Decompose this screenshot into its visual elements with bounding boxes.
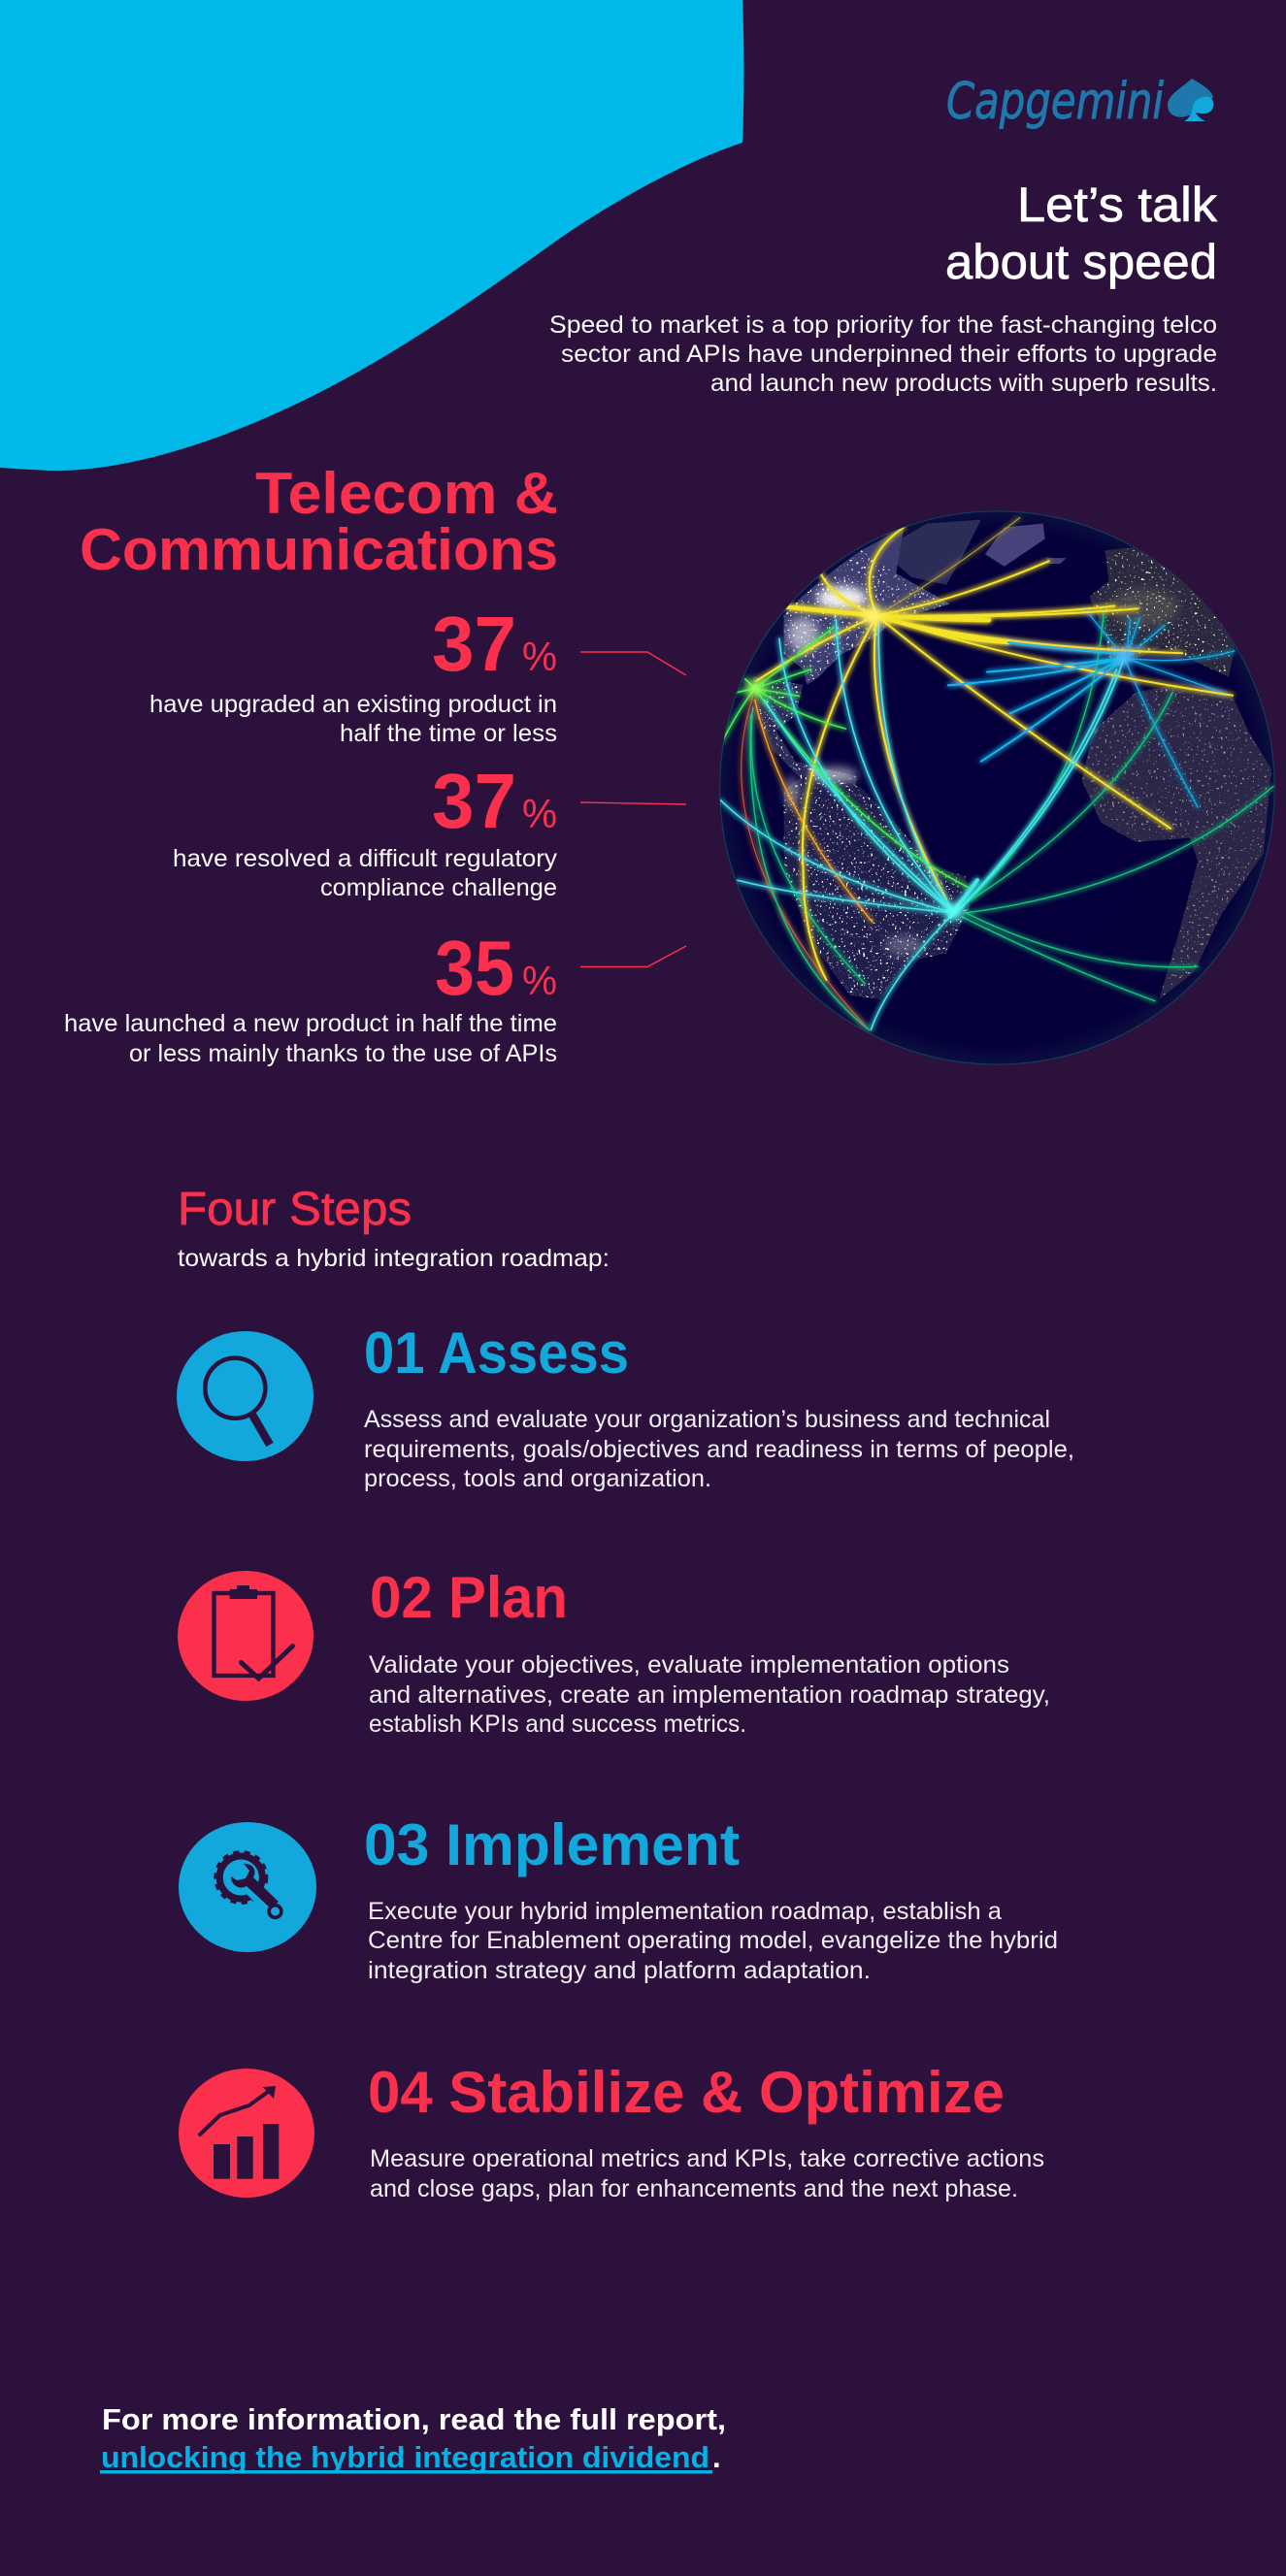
call to action bbox=[100, 2402, 726, 2474]
heading: Four Steps: Four Steps bbox=[178, 1184, 412, 1235]
step 04: Stabilize & Optimize: 04 Stabilize & Optimize bbox=[368, 2060, 1005, 2125]
heading: Telecom & Communications bbox=[80, 461, 558, 582]
stat: 37% regulatory: % bbox=[522, 791, 557, 836]
subheading: towards a hybrid integration roadmap: bbox=[178, 1245, 610, 1272]
call to action: . bbox=[712, 2440, 721, 2474]
network arcs bbox=[720, 518, 1273, 1029]
stat: 35% launched: % bbox=[522, 958, 557, 1003]
logo: Capgemini: Capgemini bbox=[946, 73, 1164, 131]
step 03: Implement: 03 Implement bbox=[364, 1812, 740, 1877]
step 03: Implement bbox=[179, 1812, 1058, 1984]
bright metropolitan glows bbox=[784, 586, 1178, 957]
step 03: Implement: integration strategy and platform adaptation. bbox=[368, 1957, 871, 1984]
stat: 35% launched: have launched a new product in half the time bbox=[64, 1010, 557, 1037]
stat: 37% upgraded: % bbox=[522, 634, 557, 679]
title bbox=[945, 178, 1218, 289]
intro paragraph: Speed to market is a top priority for the fast-changing telco bbox=[549, 311, 1217, 339]
heading: Telecom & Communications: Telecom & bbox=[255, 461, 558, 526]
stat: 35% launched: or less mainly thanks to the use of APIs bbox=[129, 1040, 557, 1067]
step 01: Assess: 01 Assess bbox=[364, 1321, 629, 1386]
stat: 37% upgraded bbox=[149, 601, 557, 747]
title: Let’s talk bbox=[1017, 178, 1218, 232]
step 04: Stabilize & Optimize bbox=[179, 2060, 1044, 2202]
call to action: For more information, read the full report, bbox=[102, 2402, 726, 2436]
icon: clipboard bbox=[178, 1571, 313, 1701]
step 02: Plan bbox=[178, 1565, 1050, 1738]
icon: gear and wrench bbox=[179, 1822, 316, 1952]
heading: Telecom & Communications: Communications bbox=[80, 517, 558, 582]
step 02: Plan: and alternatives, create an implementation roadmap strategy, bbox=[369, 1681, 1050, 1709]
stat: 37% upgraded: have upgraded an existing product in bbox=[149, 691, 557, 718]
step 04: Stabilize & Optimize: and close gaps, plan for enhancements and the next phase. bbox=[370, 2175, 1018, 2202]
globe with network arcs bbox=[720, 511, 1274, 1064]
icon: spade bbox=[1168, 79, 1213, 121]
decorative cyan blob bbox=[0, 0, 743, 471]
stat: 35% launched bbox=[64, 925, 557, 1067]
step 02: Plan: Validate your objectives, evaluate implementation options bbox=[369, 1651, 1009, 1679]
stat: 37% regulatory: have resolved a difficult regulatory bbox=[173, 845, 558, 872]
step 02: Plan: establish KPIs and success metrics. bbox=[369, 1711, 746, 1738]
intro paragraph: sector and APIs have underpinned their efforts to upgrade bbox=[561, 341, 1217, 368]
intro paragraph bbox=[549, 311, 1217, 397]
step 01: Assess: process, tools and organization. bbox=[364, 1465, 711, 1492]
step 04: Stabilize & Optimize: Measure operational metrics and KPIs, take corrective actions bbox=[370, 2145, 1044, 2172]
icon: magnifier bbox=[177, 1331, 313, 1461]
stat: 37% upgraded: 37 bbox=[432, 601, 516, 687]
stat: 37% regulatory: compliance challenge bbox=[320, 874, 557, 901]
step 01: Assess bbox=[177, 1321, 1074, 1492]
step 01: Assess: requirements, goals/objectives and readiness in terms of people, bbox=[364, 1436, 1074, 1463]
city light speckle bbox=[753, 550, 970, 999]
icon: growth chart bbox=[179, 2069, 314, 2198]
stat: 37% regulatory bbox=[173, 758, 558, 901]
connector lines bbox=[580, 652, 686, 966]
land masses bbox=[753, 520, 1271, 999]
intro paragraph: and launch new products with superb results. bbox=[710, 370, 1217, 397]
hubs bbox=[746, 604, 1132, 920]
title: about speed bbox=[945, 235, 1217, 289]
stat: 37% upgraded: half the time or less bbox=[340, 720, 557, 747]
step 01: Assess: Assess and evaluate your organization’s business and technical bbox=[364, 1406, 1050, 1433]
step 03: Implement: Execute your hybrid implementation roadmap, establish a bbox=[368, 1898, 1002, 1925]
stat: 37% regulatory: 37 bbox=[432, 758, 516, 844]
call to action: unlocking the hybrid integration dividend bbox=[101, 2440, 709, 2474]
stat: 35% launched: 35 bbox=[435, 925, 514, 1011]
step 03: Implement: Centre for Enablement operating model, evangelize the hybrid bbox=[368, 1927, 1058, 1954]
step 02: Plan: 02 Plan bbox=[370, 1565, 568, 1630]
